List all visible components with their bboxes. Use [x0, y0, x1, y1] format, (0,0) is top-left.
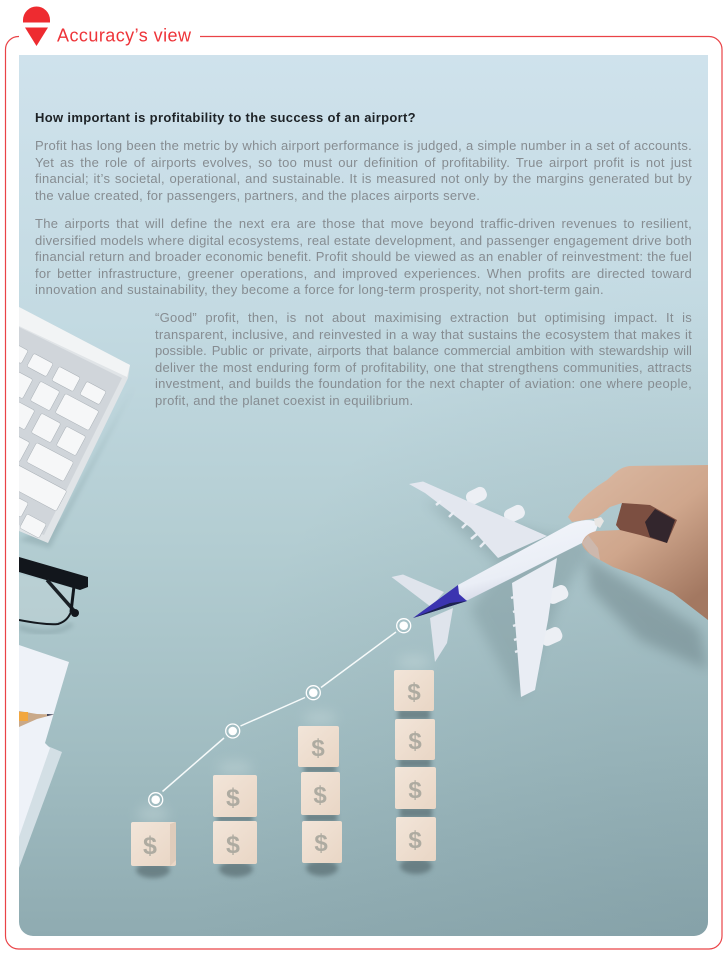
block shadows: [136, 709, 432, 878]
block stack 1: $: [143, 832, 157, 860]
block stack 4: $: [408, 777, 422, 804]
blue tail cone: [413, 585, 467, 618]
paragraph 2: [35, 216, 692, 297]
fuselage: [457, 520, 597, 600]
chart glow: [137, 655, 431, 822]
block stack 4: $: [407, 679, 421, 706]
paragraph 2: for better infrastructure, greener operations, and improved experiences. When profits are directed toward: [35, 266, 692, 281]
papers and pencil: [19, 645, 69, 868]
paragraph 1: financial; it’s societal, operational, and sustainable. It is measured not only by the margins generated but by: [35, 171, 692, 186]
keyboard: [19, 307, 130, 548]
glasses: [19, 557, 88, 632]
block stack 4: $: [408, 728, 422, 755]
paragraph 3: profit, and the planet coexist in equilibrium.: [155, 393, 413, 408]
paragraph 3: possible. Public or private, airports that balance commercial ambition with stewardship will: [155, 343, 692, 358]
paragraph 3: deliver the most enduring form of profitability, one that strengthens communities, attracts: [155, 360, 692, 375]
block stack 4: [394, 670, 436, 861]
paragraph 2: diversified models where digital ecosystems, real estate development, and passenger engagement drive both: [35, 233, 692, 248]
paragraph 3: investment, and builds the foundation for the next chapter of aviation: one where people,: [155, 376, 692, 391]
growth line with nodes: [149, 619, 411, 807]
paragraph 2: financial return and broader economic benefit. Profit should be viewed as an enabler of reinvestment: the fuel: [35, 249, 692, 264]
section title: Accuracy’s view: [57, 26, 192, 46]
logo icon: red dome and triangle: [23, 7, 50, 46]
block stack 1: [131, 822, 176, 866]
plane nose tip: [594, 517, 604, 528]
upper wing with engines: [409, 482, 547, 558]
block stack 3: [298, 726, 342, 863]
block stack 2: $: [226, 784, 240, 812]
tailplanes: [392, 574, 453, 662]
lower wing with engines: [511, 558, 570, 697]
airplane: [392, 482, 597, 700]
paragraph 3: transparent, inclusive, and reinvested in a way that sustains the ecosystem that makes it: [155, 327, 692, 342]
block stack 3: $: [311, 735, 325, 762]
thumbnail: [582, 535, 600, 560]
paragraph 1: Profit has long been the metric by which airport performance is judged, a simple number in a set of accounts.: [35, 138, 692, 153]
paragraph 1: [35, 138, 692, 203]
hand: [568, 465, 708, 620]
hand shadow: [585, 555, 708, 670]
paragraph 1: the value created, for passengers, partners, and the places airports serve.: [35, 188, 480, 203]
block stack 2: [213, 775, 257, 864]
paragraph 3: “Good” profit, then, is not about maximising extraction but optimising impact. It is: [155, 310, 692, 325]
block stack 2: $: [226, 831, 240, 859]
block stack 3: $: [314, 830, 328, 857]
paragraph 3: [155, 310, 692, 408]
paragraph 1: Yet as the role of airports evolves, so too must our definition of profitability. True airport profit is not just: [35, 155, 692, 170]
paragraph 2: The airports that will define the next era are those that move beyond traffic-driven revenues to resilient,: [35, 216, 692, 231]
paragraph 2: innovation and sustainability, they become a force for long-term prosperity, not short-term gain.: [35, 282, 604, 297]
heading: How important is profitability to the success of an airport?: [35, 110, 416, 125]
block stack 4: $: [408, 827, 422, 854]
block stack 3: $: [313, 782, 327, 809]
hollow between finger and thumb: [616, 503, 677, 543]
